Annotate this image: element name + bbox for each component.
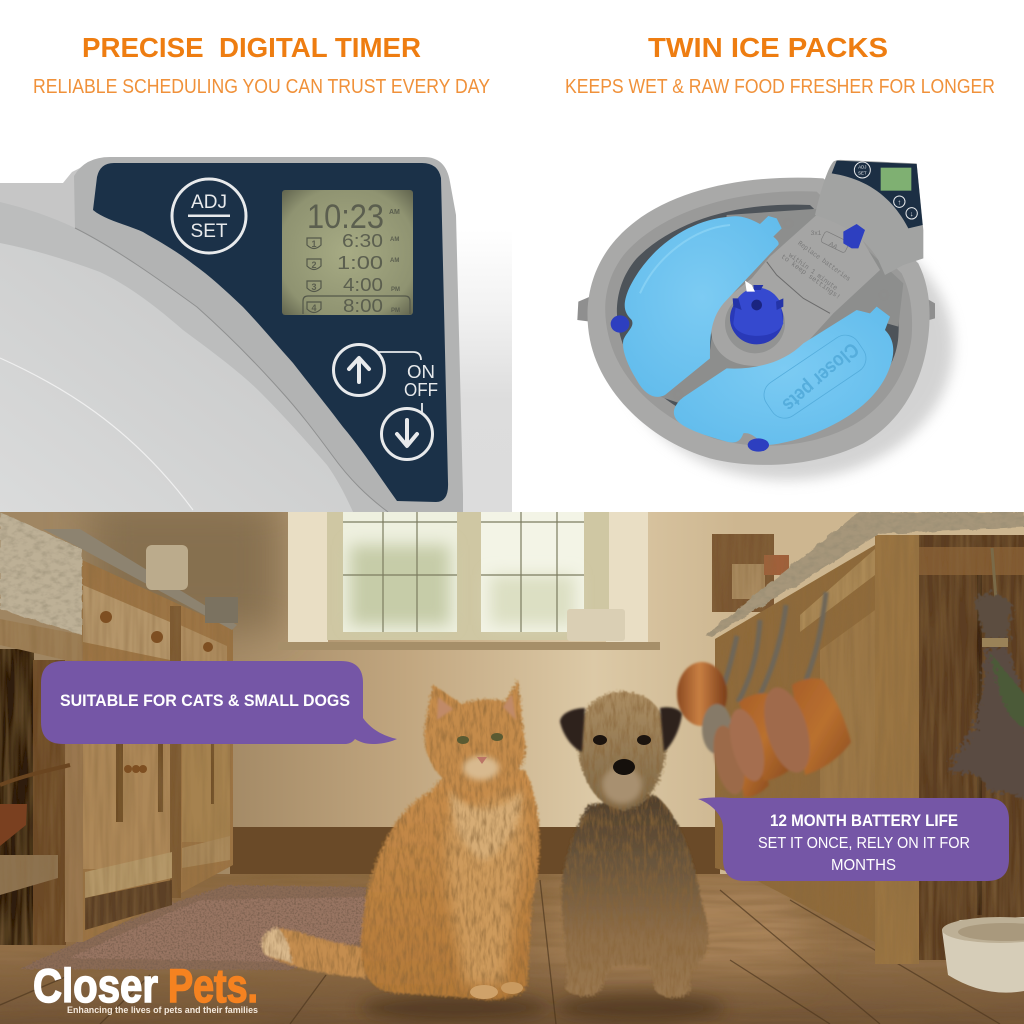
battery cover and hub: to keep settings! [779,253,842,302]
lcd display: 8:00 [343,296,383,316]
button: down arrow [382,403,432,460]
bowl rim [0,202,388,512]
floor [0,874,1024,1024]
right island [712,534,1024,964]
button: adj set: ADJ [191,192,227,213]
tower with control panel [815,160,923,275]
tower with control panel: SET [858,170,867,175]
dog [562,692,708,998]
logo: closer pets: Enhancing the lives of pets and their families [67,1005,258,1016]
lcd display: 1:00 [337,253,383,273]
logo: closer pets: Pets. [168,959,258,1012]
button: adj set: SET [191,221,228,242]
callout: 12 month battery life: 12 MONTH BATTERY LIFE [770,812,958,830]
panel: digital timer close-up photo [0,157,512,512]
ice pack: right: Closer pets [778,338,863,416]
tray shell [587,178,930,465]
tower with control panel: ↓ [910,209,913,218]
callout: suitable for cats and small dogs [41,661,397,744]
window [278,512,660,650]
blue clips [611,224,865,452]
floor shadows [360,994,725,1022]
panel: ice pack tray photo [577,160,953,480]
callout: 12 month battery life: SET IT ONCE, RELY ON IT FOR [758,835,970,852]
battery cover and hub: Replace batteries [796,240,852,284]
logo: closer pets [34,966,258,1015]
callout: 12 month battery life: MONTHS [831,857,896,874]
lcd display: AM [389,209,400,216]
battery cover and hub: 3x1 [811,230,822,237]
tower with control panel: ADJ [858,165,866,170]
ice pack: right [674,307,893,445]
on off label [404,365,438,396]
callout: 12 month battery life [698,797,1009,881]
lcd display: 2 [311,260,317,270]
baseboard [230,827,720,874]
cat [262,680,539,1000]
cat face [437,694,523,999]
rug [20,885,366,970]
callout: suitable for cats and small dogs: SUITABLE FOR CATS & SMALL DOGS [60,692,350,710]
battery cover and hub: within 1 minute [787,252,838,293]
ice pack: left [623,216,782,397]
battery cover and hub: AA [827,241,839,251]
wall [0,512,1024,877]
bowl interior [0,243,353,512]
storage jar [146,545,188,590]
on off label: OFF [404,380,438,400]
lcd display: 4:00 [343,275,383,295]
copper pans [677,592,851,797]
ceramic bowl [942,917,1024,993]
lavender bundle [950,548,1024,800]
blue knob [730,281,783,344]
lcd display: PM [391,308,400,314]
page background [0,0,1024,512]
lcd display: 10:23 [307,198,384,236]
lcd display: 3 [311,282,317,292]
cabinet knobs and copper bowl [0,611,213,846]
tray tabs [577,297,935,322]
on off label: ON [407,362,435,382]
logo: closer pets: Closer [33,959,158,1012]
button: adj set [172,179,246,253]
stone island top [705,512,1024,637]
subheading: reliable scheduling: RELIABLE SCHEDULING YOU CAN TRUST EVERY DAY [33,76,490,98]
screw posts [674,219,888,398]
lcd display: AM [390,237,399,243]
tower with control panel: ↑ [897,197,901,206]
panel: kitchen photo with cat and dog [0,500,1024,1024]
window reveal [288,512,648,644]
lcd display: 1 [311,239,317,249]
stone sink and worktop [0,512,238,635]
left cabinets [0,560,233,945]
lcd display [282,190,413,316]
button: up arrow [334,344,421,396]
heading: precise digital timer: PRECISE DIGITAL TIMER [82,32,421,63]
lcd display: PM [391,287,400,293]
lcd display: AM [390,258,399,264]
heading: twin ice packs: TWIN ICE PACKS [648,32,888,63]
tray floor [660,208,903,403]
dog face [560,707,682,804]
battery cover and hub [711,213,880,366]
lcd display: 6:30 [342,231,383,251]
lcd display: 4 [311,303,317,313]
